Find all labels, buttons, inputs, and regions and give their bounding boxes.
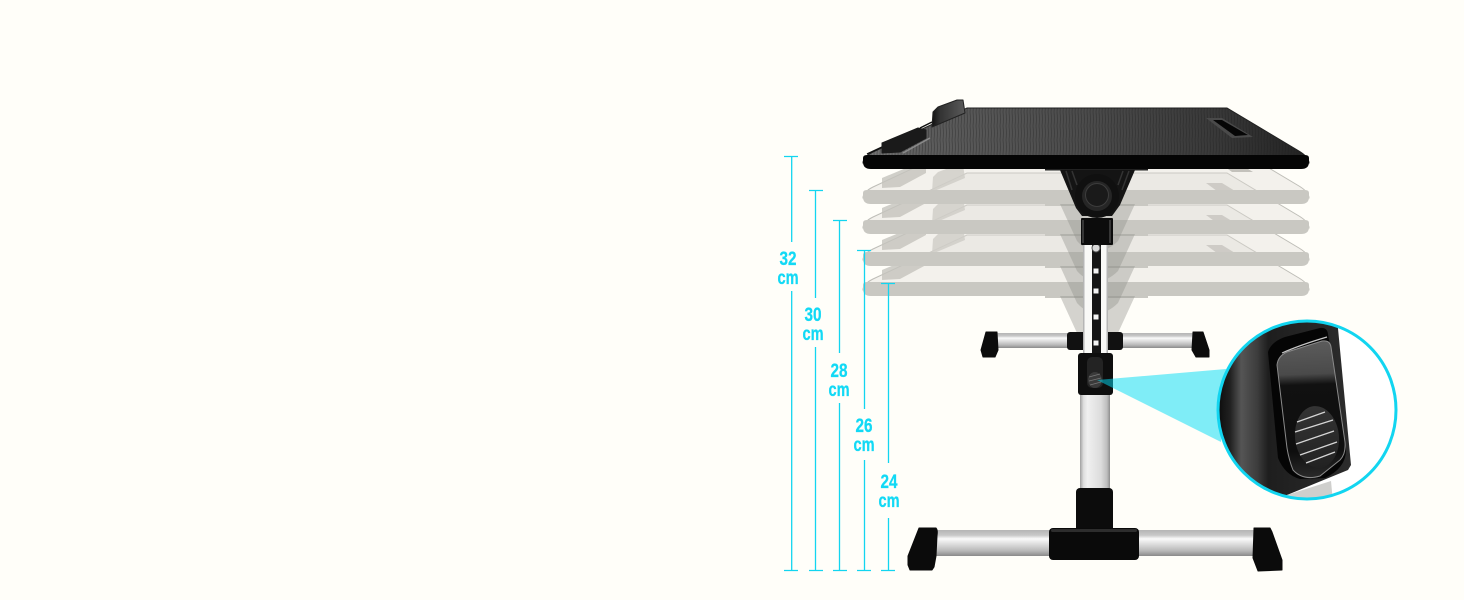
lever grip xyxy=(1294,406,1339,464)
recess highlight xyxy=(1282,337,1327,353)
dimension: 24 cm: cm xyxy=(878,491,900,512)
dimension: 26 cm: cm xyxy=(854,435,874,456)
tube below housing xyxy=(1287,481,1332,498)
lower tube xyxy=(1080,393,1110,491)
height dimensions xyxy=(778,156,900,570)
lever housing xyxy=(1220,322,1351,495)
dimension: 32 cm: 32 xyxy=(780,249,796,270)
dimension: 26 cm xyxy=(854,250,874,570)
lever recess xyxy=(1268,328,1346,479)
magnification beam xyxy=(1097,369,1226,442)
ghost desk positions xyxy=(863,135,1309,343)
front clip xyxy=(882,128,926,153)
infographic canvas xyxy=(778,100,1398,572)
height lock collar xyxy=(1078,353,1113,395)
main desk top xyxy=(863,100,1309,170)
dimension: 24 cm: 24 xyxy=(880,472,898,493)
pen slot xyxy=(1206,118,1253,138)
tilt hinge with knob xyxy=(1060,170,1135,245)
dimension: 30 cm: cm xyxy=(802,324,824,345)
dimension: 26 cm: 26 xyxy=(856,416,872,437)
lens ring xyxy=(1218,321,1396,499)
zoomed lever detail xyxy=(1210,318,1396,505)
mounting plate xyxy=(1045,169,1148,170)
dimension: 32 cm xyxy=(778,156,798,570)
dimension: 30 cm xyxy=(802,190,824,570)
dimension: 28 cm xyxy=(828,220,850,570)
upper telescoping tube with holes xyxy=(1083,243,1108,355)
front edge xyxy=(863,155,1309,169)
dimension: 28 cm: cm xyxy=(828,380,850,401)
dimension: 30 cm: 30 xyxy=(804,305,822,326)
dimension: 24 cm xyxy=(878,284,900,570)
desk surface xyxy=(863,108,1309,163)
lever face xyxy=(1277,341,1345,478)
clip rail xyxy=(903,138,930,153)
dimension: 32 cm: cm xyxy=(778,268,798,289)
base tube with end feet xyxy=(908,488,1282,571)
rear crossbar with feet xyxy=(981,332,1209,357)
rim wire xyxy=(867,122,932,154)
wood grain xyxy=(863,108,1309,163)
rear clip xyxy=(932,100,965,127)
dimension: 28 cm: 28 xyxy=(830,361,848,382)
